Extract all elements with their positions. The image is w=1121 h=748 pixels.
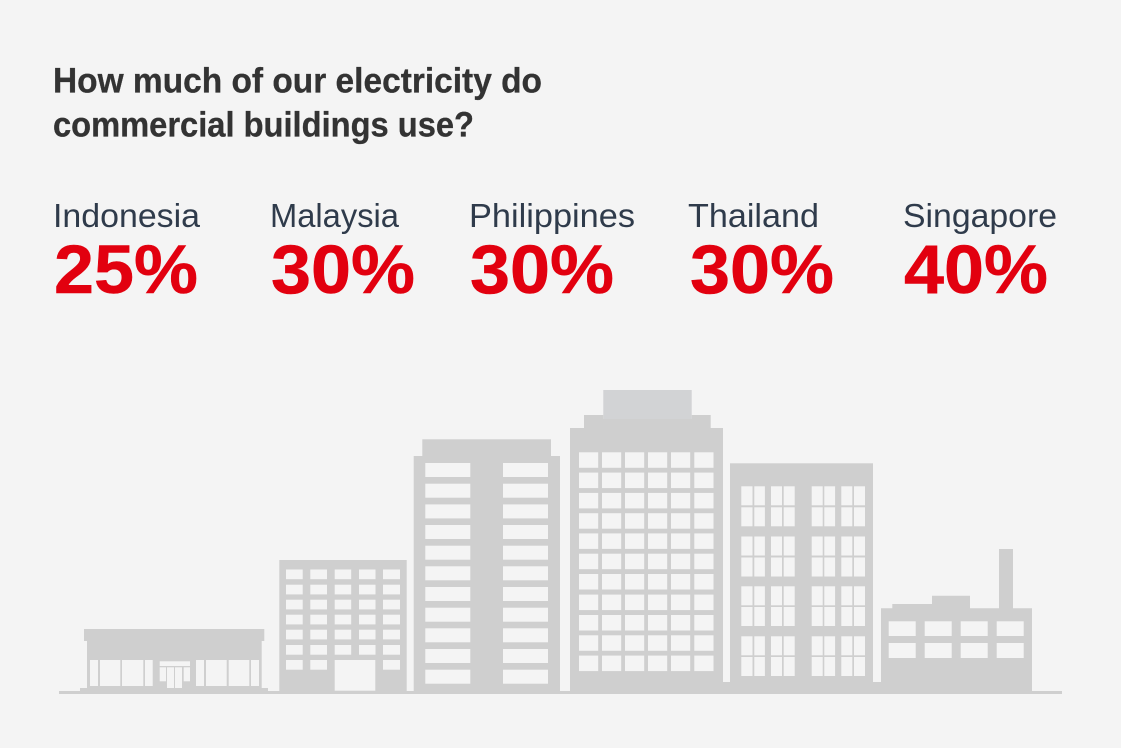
stat: Singapore 40% (903, 197, 1057, 308)
stat: Singapore 40%: 40% (904, 231, 1048, 308)
stat: Thailand 30%: 30% (690, 231, 834, 308)
stat: Malaysia 30% (270, 197, 415, 308)
raised plinth between towers (723, 682, 1032, 692)
stat: Malaysia 30%: 30% (271, 231, 415, 308)
building: low-rise storefront (80, 629, 268, 691)
stat: Malaysia 30%: Malaysia (270, 197, 400, 234)
title: commercial buildings use? (53, 106, 474, 145)
building: mid-rise office (279, 560, 407, 691)
stat: Indonesia 25%: Indonesia (53, 197, 201, 234)
ground line (59, 691, 1062, 694)
building: factory with chimney (881, 549, 1032, 691)
stat: Thailand 30% (688, 197, 834, 308)
stat: Philippines 30%: 30% (470, 231, 614, 308)
stat: Philippines 30%: Philippines (469, 197, 635, 234)
title: How much of our electricity do (53, 61, 542, 100)
building: tallest grid-window tower (570, 390, 723, 691)
building: paned-window tower (730, 463, 873, 691)
stat: Philippines 30% (469, 197, 635, 308)
stat: Indonesia 25%: 25% (54, 231, 198, 308)
cityscape illustration (59, 390, 1062, 694)
stat: Singapore 40%: Singapore (903, 197, 1057, 234)
building: tall two-column tower (414, 439, 560, 691)
title (53, 61, 542, 145)
stat: Thailand 30%: Thailand (688, 197, 819, 234)
stat: Indonesia 25% (53, 197, 201, 308)
